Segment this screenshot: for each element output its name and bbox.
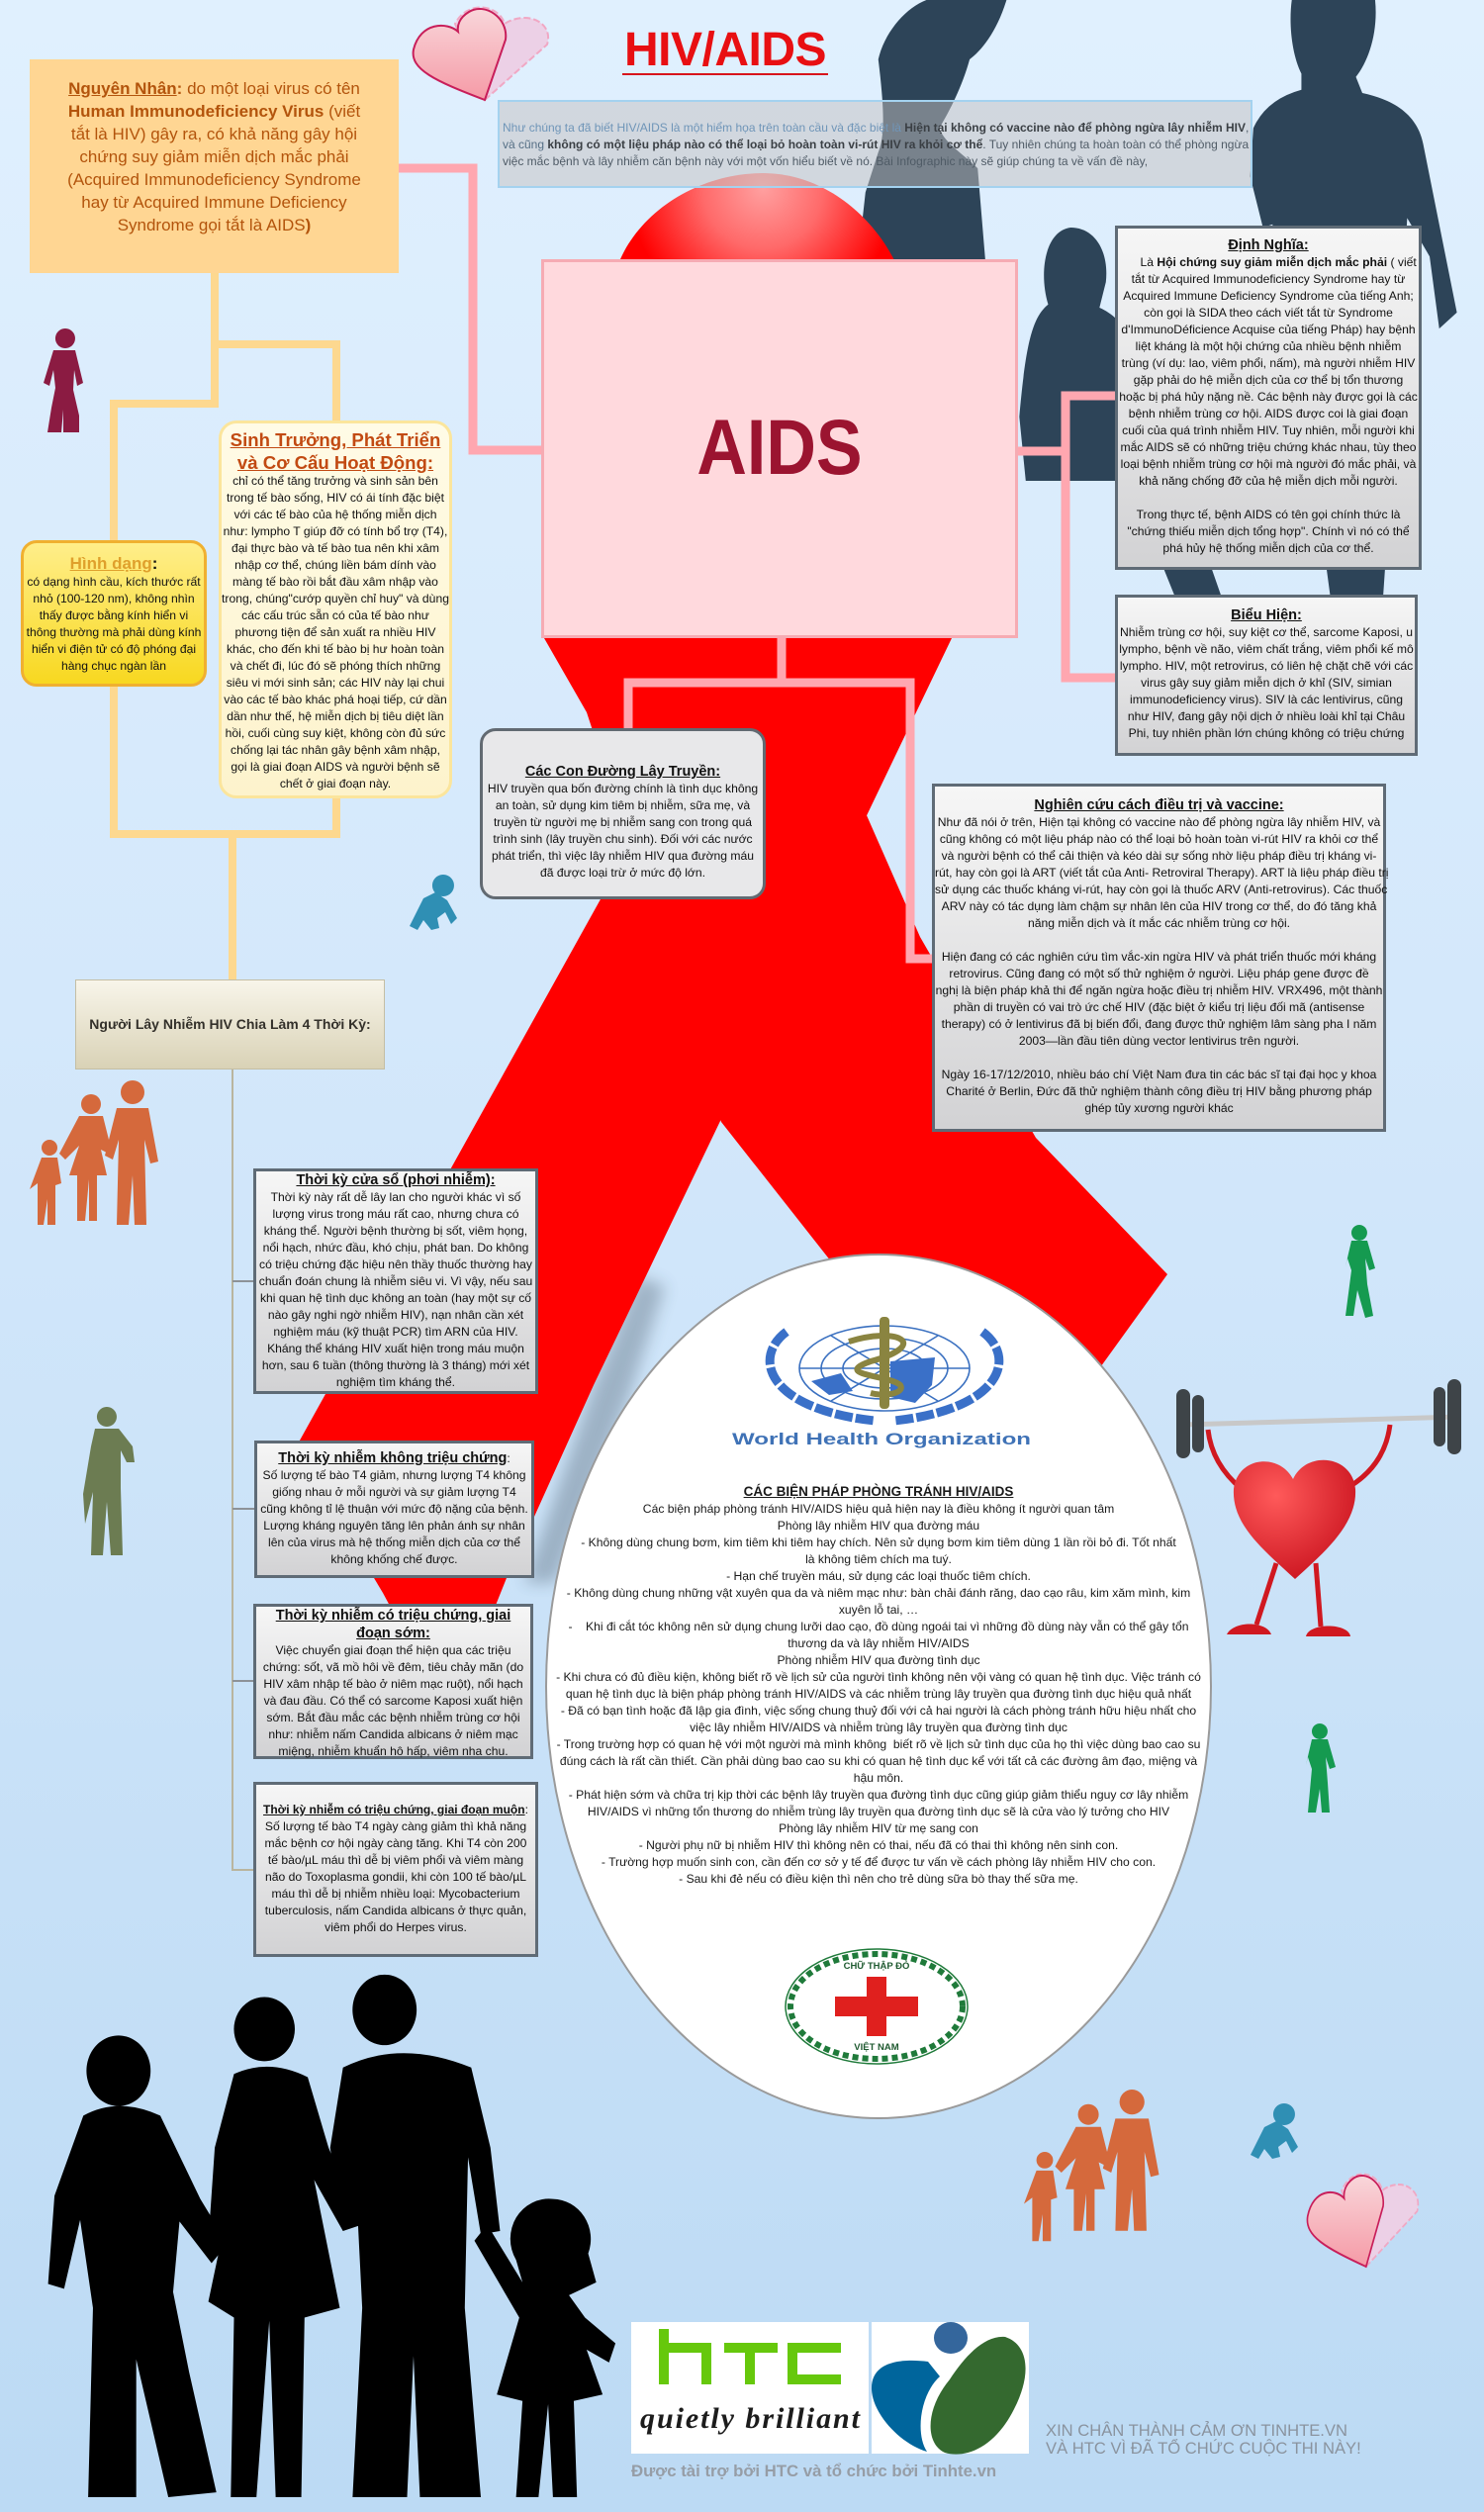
icon: pair of hearts, top bbox=[414, 7, 548, 100]
panel: definition: tắt từ Acquired Immunodeficiency Syndrome hay từ bbox=[1132, 272, 1405, 286]
prevention text: - Trong trường hợp có quan hệ với một người mà mình không biết rõ về lịch sử tình dục của họ thì việc dùng bao cao su bbox=[557, 1737, 1200, 1751]
panel: definition: Định Nghĩa: bbox=[1228, 237, 1309, 253]
title: HIV/AIDS bbox=[624, 24, 826, 76]
panel: treatment and vaccine research: ARV này có tác dụng làm chậm sự nhân lên của HIV trong cơ thể, do đó tăng khả bbox=[942, 899, 1376, 913]
panel: growth and activity: nhập cơ thể, chúng liền bám dính vào bbox=[234, 558, 436, 572]
panel: window period: khi quan hệ tình dục không an toàn (hay một sự cố bbox=[260, 1291, 531, 1305]
intro text box: việc mắc bệnh và lây nhiễm căn bệnh này với một vốn hiểu biết về nó. Bài Infographic này sẽ giúp chúng ta về vấn đề này, bbox=[503, 154, 1148, 168]
panel: window period bbox=[253, 1168, 538, 1394]
panel: treatment and vaccine research: năng miễn dịch và ít mắc các nhiễm trùng cơ hội. bbox=[1028, 916, 1290, 930]
prevention text: là không tiêm chích ma tuý. bbox=[805, 1552, 952, 1566]
prevention text: Phòng nhiễm HIV qua đường tình dục bbox=[777, 1653, 980, 1667]
panel: definition: Trong thực tế, bệnh AIDS có tên gọi chính thức là bbox=[1137, 508, 1400, 521]
panel: asymptomatic stage: không khống chế được. bbox=[330, 1552, 458, 1566]
panel: window period: nào gây nghi ngờ nhiễm HIV), nạn nhân cần xét bbox=[268, 1308, 523, 1322]
prevention text: quan hệ tình dục là biện pháp phòng tránh HIV/AIDS và các nhiễm trùng lây truyền qua đường tình dục hiệu quả nhất bbox=[566, 1687, 1191, 1701]
thank you note: VÀ HTC VÌ ĐÃ TỔ CHỨC CUỘC THI NÀY! bbox=[1046, 2439, 1361, 2458]
silhouette: black family bbox=[48, 1975, 615, 2497]
prevention text: việc lây nhiễm HIV/AIDS và nhiễm trùng lây truyền qua đường tình dục bbox=[690, 1721, 1067, 1734]
panel: cause: Human Immunodeficiency Virus (viết bbox=[68, 102, 360, 121]
prevention text: - Trường hợp muốn sinh con, cần đến cơ sở y tế để được tư vấn về cách phòng lây nhiễm HIV cho con. bbox=[602, 1855, 1156, 1869]
panel: asymptomatic stage: lên của virus mà hệ thống miễn dịch của cơ thể bbox=[268, 1535, 520, 1549]
prevention text: xuyên lỗ tai, … bbox=[839, 1603, 918, 1617]
panel: treatment and vaccine research: 2003—lần đầu tiên dùng vector lentivirus trên người. bbox=[1019, 1034, 1299, 1048]
panel: early symptomatic stage: đoạn sớm: bbox=[356, 1626, 430, 1641]
panel: manifestations: Nhiễm trùng cơ hội, suy kiệt cơ thể, sarcome Kaposi, u bbox=[1120, 625, 1413, 639]
panel: shape: nhỏ (100-120 nm), không nhìn bbox=[33, 592, 195, 605]
panel: treatment and vaccine research: therapy) có ở lentivirus đã bị biến đổi, đang được thử nghiệm lâm sàng pha I năm bbox=[942, 1017, 1376, 1031]
panel: treatment and vaccine research: phần di truyền có vai trò ức chế HIV (đặc biệt ở kiểu trị liệu đối mã (antisense bbox=[954, 1000, 1364, 1014]
prevention text: - Sau khi đẻ nếu có điều kiện thì nên cho trẻ dùng sữa bò thay thế sữa mẹ. bbox=[679, 1872, 1078, 1886]
panel: shape: hiển vi điện tử có độ phóng đại bbox=[32, 642, 196, 656]
icon: orange family left bbox=[30, 1080, 158, 1225]
panel: window period: nổi hạch, nhức đầu, khó chịu, phát ban. Do không bbox=[263, 1241, 528, 1255]
panel: early symptomatic stage: và đau đầu. Có thể có sarcome Kaposi xuất hiện bbox=[264, 1694, 522, 1708]
prevention text: - Đã có bạn tình hoặc đã lập gia đình, việc sống chung thuỷ đối với cả hai người là cách phòng tránh hữu hiệu nhất cho bbox=[561, 1704, 1196, 1718]
icon: red woman bbox=[44, 328, 83, 432]
panel: treatment and vaccine research: nghị là biện pháp khả thi để ngăn ngừa hoặc điều trị nhiễm HIV. VRX496, một thành bbox=[936, 983, 1382, 997]
panel: asymptomatic stage bbox=[254, 1441, 534, 1578]
logo: HTC quietly brilliant bbox=[631, 2322, 869, 2454]
logo: Tinhte.vn bbox=[872, 2322, 1029, 2455]
panel: growth and activity: chết ở giai đoạn này. bbox=[280, 777, 391, 791]
panel: growth and activity: gọi là giai đoạn AIDS và người bệnh sẽ bbox=[231, 760, 440, 774]
panel: definition: loại bệnh nhiễm trùng cơ hội mà người đó mắc phải, và bbox=[1121, 457, 1416, 471]
panel: late symptomatic stage: tuberculosis, nấm Candida albicans ở thực quản, bbox=[265, 1904, 526, 1917]
prevention text: - Người phụ nữ bị nhiễm HIV thì không nên có thai, nếu đã có thai thì không nên sinh con. bbox=[639, 1838, 1118, 1852]
panel: manifestations: lympho. HIV, một retrovirus, có liên hệ chặt chẽ với các bbox=[1120, 659, 1413, 673]
panel: cause: Syndrome gọi tắt là AIDS) bbox=[118, 216, 311, 234]
panel: growth and activity: đại thực bào và tế bào tua nên khi xâm bbox=[232, 541, 439, 555]
panel: growth and activity: Sinh Trưởng, Phát Triển bbox=[231, 429, 440, 450]
panel: shape bbox=[21, 540, 207, 687]
panel: late symptomatic stage: viêm phổi do Herpes virus. bbox=[325, 1920, 467, 1934]
panel: late symptomatic stage: Số lượng tế bào T4 ngày càng giảm thì khả năng bbox=[265, 1819, 526, 1833]
panel: window period: nghiệm tìm kháng thể. bbox=[336, 1375, 455, 1389]
panel: late symptomatic stage bbox=[253, 1782, 538, 1957]
panel: early symptomatic stage: Thời kỳ nhiễm có triệu chứng, giai bbox=[276, 1608, 510, 1624]
panel: asymptomatic stage: giống nhau ở mỗi người và sự giảm lượng T4 bbox=[272, 1485, 516, 1499]
logo: World Health Organization: World Health Organization bbox=[732, 1430, 1031, 1448]
prevention text: thương da và lây nhiễm HIV/AIDS bbox=[788, 1636, 970, 1650]
panel: window period: Kháng thể kháng HIV xuất hiện trong máu muộn bbox=[267, 1342, 524, 1355]
panel: early symptomatic stage: sớm. Bắt đầu mắc các bệnh nhiễm trùng cơ hội bbox=[266, 1711, 520, 1724]
panel: window period: nghiệm máu (kỹ thuật PCR) tìm ARN của HIV. bbox=[273, 1325, 518, 1339]
prevention text: CÁC BIỆN PHÁP PHÒNG TRÁNH HIV/AIDS bbox=[744, 1484, 1013, 1499]
panel: asymptomatic stage: Số lượng tế bào T4 giảm, nhưng lượng T4 không bbox=[263, 1468, 525, 1482]
panel: transmission routes bbox=[480, 728, 766, 899]
panel: treatment and vaccine research: Ngày 16-17/12/2010, nhiều báo chí Việt Nam đưa tin các bác sĩ tại đại học y khoa bbox=[942, 1068, 1376, 1081]
icon: blue baby right bbox=[1251, 2103, 1298, 2159]
panel: definition: Acquired Immune Deficiency Syndrome của tiếng Anh; bbox=[1123, 289, 1414, 303]
panel: growth and activity: chống lại tác nhân gây bệnh xâm nhập, bbox=[231, 743, 440, 757]
prevention text: Phòng lây nhiễm HIV qua đường máu bbox=[778, 1519, 979, 1533]
panel: cause: chứng suy giảm miễn dịch mắc phải bbox=[79, 147, 349, 166]
panel: window period: hơn, sau 6 tuần (thông thường là 3 tháng) mới xét bbox=[262, 1358, 529, 1372]
panel: growth and activity: khác, cho đến khi tế bào bị hư hoàn toàn bbox=[227, 642, 444, 656]
logo: Vietnam Red Cross: CHỮ THẬP ĐỎ bbox=[844, 1960, 909, 1972]
intro text box bbox=[498, 100, 1252, 188]
panel: cause bbox=[30, 59, 399, 273]
panel: definition: cuối của quá trình nhiễm HIV. Tuy nhiên, mỗi người khi bbox=[1122, 423, 1415, 437]
panel: treatment and vaccine research: Nghiên cứu cách điều trị và vaccine: bbox=[1034, 797, 1284, 813]
sponsor caption: Được tài trợ bởi HTC và tổ chức bởi Tinhte.vn bbox=[631, 2462, 996, 2480]
panel: late symptomatic stage: máu thì dễ bị nhiễm nhiều loại: Mycobacterium bbox=[271, 1887, 520, 1901]
panel: asymptomatic stage: Lượng kháng nguyên tăng lên phản ánh sự nhân bbox=[263, 1519, 525, 1533]
panel: treatment and vaccine research: và người bệnh có thể cải thiện và kéo dài sự sống nhờ liệu pháp điều trị kháng vi- bbox=[942, 849, 1376, 863]
icon: pair of hearts, bottom bbox=[1307, 2174, 1418, 2267]
prevention text bbox=[556, 1484, 1201, 1886]
prevention text: Phòng lây nhiễm HIV từ mẹ sang con bbox=[779, 1821, 978, 1835]
panel: early symptomatic stage: miệng, nhiễm khuẩn hô hấp, viêm nha chu. bbox=[278, 1744, 509, 1758]
panel: growth and activity: chỉ có thể tăng trưởng và sinh sản bên bbox=[232, 474, 438, 488]
panel: early symptomatic stage bbox=[253, 1604, 533, 1759]
panel: growth and activity: trong, chúng"cướp quyền chỉ huy" và dùng bbox=[222, 592, 449, 605]
panel: definition: bệnh nhiễm trùng cơ hội. AIDS được coi là giai đoạn bbox=[1129, 407, 1408, 420]
panel: window period: có triệu chứng đặc hiệu nên thầy thuốc thường hay bbox=[259, 1257, 532, 1271]
panel: growth and activity: và Cơ Cấu Hoạt Động: bbox=[237, 452, 433, 473]
panel: transmission routes: phát triển, thì việc lây nhiễm HIV qua đường máu bbox=[492, 849, 754, 863]
heading box: four stages bbox=[75, 979, 385, 1070]
prevention text: - Không dùng chung những vật xuyên qua da và niêm mạc như: bàn chải đánh răng, dao cạo râu, kim xăm mình, kim bbox=[567, 1586, 1190, 1600]
prevention text: HIV/AIDS vì những tổn thương do nhiễm trùng lây truyền qua đường tình dục sẽ là cửa vào lý tưởng cho HIV bbox=[588, 1805, 1169, 1818]
panel: window period: kháng thể. Người bệnh thường bị sốt, viêm họng, bbox=[264, 1224, 527, 1238]
panel: manifestations: Phi, tuy nhiên phần lớn chúng không có triệu chứng bbox=[1129, 726, 1404, 740]
panel: early symptomatic stage: chứng: sốt, vã mồ hôi về đêm, tiêu chảy mãn (do bbox=[263, 1660, 523, 1674]
prevention ellipse bbox=[545, 1254, 1212, 2119]
panel: cause: (Acquired Immunodeficiency Syndrome bbox=[67, 170, 361, 189]
panel: manifestations bbox=[1115, 595, 1418, 756]
panel: window period: Thời kỳ cửa sổ (phơi nhiễm): bbox=[296, 1172, 496, 1188]
panel: late symptomatic stage: não do Toxoplasma gondii, khi còn 100 tế bào/µL bbox=[265, 1870, 526, 1884]
panel: transmission routes: an toàn, sử dụng kim tiêm bị nhiễm, sữa mẹ, và bbox=[496, 798, 750, 812]
panel: growth and activity bbox=[219, 420, 452, 798]
panel: treatment and vaccine research: retrovirus. Cũng đang có một số thử nghiệm ở người. Liệu pháp gene được đề bbox=[949, 967, 1369, 980]
panel: treatment and vaccine research bbox=[932, 784, 1386, 1132]
AIDS ribbon bbox=[296, 173, 1167, 1682]
panel: early symptomatic stage: HIV xâm nhập tế bào ở niêm mạc ruột), nổi hạch bbox=[263, 1677, 523, 1691]
prevention text: - Khi chưa có đủ điều kiện, không biết rõ về lịch sử của người tình không nên vội vàng có quan hệ tình dục. Việc tránh có bbox=[556, 1670, 1201, 1684]
panel: growth and activity: vào các tế bào khác phá hoại tiếp, cứ dần bbox=[224, 693, 447, 706]
icon: orange family right bbox=[1024, 2090, 1159, 2241]
panel: shape: hàng chục ngàn lần bbox=[61, 659, 166, 673]
intro text box: Như chúng ta đã biết HIV/AIDS là một hiểm họa trên toàn cầu và đặc biệt là Hiện tại không có vaccine nào để phòng ngừa lây nhiễm HIV, bbox=[503, 121, 1249, 135]
panel: growth and activity: hồi, cuối cùng suy kiệt, không còn đủ sức bbox=[226, 726, 445, 740]
panel: treatment and vaccine research: sử dụng các thuốc kháng vi-rút, hay còn gọi là thuốc ARV (Anti-retrovirus). Các thuốc bbox=[935, 883, 1387, 896]
panel: definition bbox=[1115, 226, 1422, 570]
panel: early symptomatic stage: Việc chuyển giai đoạn thể hiện qua các triệu bbox=[275, 1643, 511, 1657]
panel: window period: Thời kỳ này rất dễ lây lan cho người khác vì số bbox=[271, 1190, 520, 1204]
panel: definition: mắc AIDS sẽ có những triệu chứng khác nhau, tùy theo bbox=[1120, 440, 1417, 454]
silhouette: woman, man and child in dark blue bbox=[858, 0, 1457, 597]
panel: definition: trùng (ví dụ: lao, viêm phổi, nấm), mà người nhiễm HIV bbox=[1122, 356, 1415, 370]
tan connector lines bbox=[114, 273, 336, 979]
panel: definition: liệt kháng là một hội chứng của nhiều bệnh nhiễm bbox=[1136, 339, 1401, 353]
panel: manifestations: Biểu Hiện: bbox=[1231, 607, 1302, 623]
prevention text: - Phát hiện sớm và chữa trị kịp thời các bệnh lây truyền qua đường tình dục cũng giúp giảm thiểu nguy cơ lây nhiễm bbox=[569, 1788, 1188, 1802]
panel: definition: còn gọi là SIDA theo cách viết tắt từ Syndrome bbox=[1144, 306, 1393, 320]
grey connector lines to the four stages bbox=[232, 1070, 254, 1870]
panel: growth and activity: với các tế bào của hệ thống miễn dịch bbox=[233, 508, 437, 521]
panel: growth and activity: trong tế bào sống, HIV có ái tính đặc biệt bbox=[227, 491, 444, 505]
prevention text: Các biện pháp phòng tránh HIV/AIDS hiệu quả hiện nay là điều không ít người quan tâm bbox=[643, 1502, 1114, 1516]
panel: definition: d'ImmunoDéficience Acquise của tiếng Pháp) hay bệnh bbox=[1121, 323, 1416, 336]
panel: treatment and vaccine research: cũng không có một liệu pháp nào có thể loại bỏ hoàn toàn vi-rút HIV ra khỏi cơ thể bbox=[940, 832, 1378, 846]
panel: manifestations: virus gây suy giảm miễn dịch ở khỉ (SIV, simian bbox=[1141, 676, 1392, 690]
panel: transmission routes: đã được loại trừ ở mức độ lớn. bbox=[540, 866, 705, 880]
pink connector lines bbox=[399, 168, 1115, 959]
panel: late symptomatic stage: mắc bệnh cơ hội ngày càng tăng. Khi T4 còn 200 bbox=[265, 1836, 526, 1850]
panel: early symptomatic stage: như: nhiễm nấm Candida albicans ở niêm mạc bbox=[268, 1727, 518, 1741]
panel: growth and activity: màng tế bào rồi bắt đầu xâm nhập vào bbox=[232, 575, 438, 589]
prevention text: - Không dùng chung bơm, kim tiêm khi tiêm hay chích. Nên sử dụng bơm kim tiêm dùng 1 lần rồi bỏ đi. Tốt nhất bbox=[581, 1535, 1176, 1549]
panel: shape: có dạng hình cầu, kích thước rất bbox=[27, 575, 201, 589]
panel: growth and activity: các cấu trúc sẵn có của tế bào như bbox=[241, 608, 429, 622]
panel: treatment and vaccine research: ghép tủy xương người khác bbox=[1084, 1101, 1234, 1115]
panel: growth and activity: như: lympho T giúp đỡ có tính bổ trợ (T4), bbox=[224, 524, 447, 538]
panel: shape: Hình dạng: bbox=[70, 554, 157, 573]
prevention text: đúng cách là rất cần thiết. Cần phải dùng bao cao su khi có quan hệ tình dục kể với tất cả các đường âm đạo, miệng và bbox=[560, 1754, 1197, 1768]
icon: green person, right lower bbox=[1306, 1723, 1336, 1813]
panel: definition: gặp phải do hệ miễn dịch của cơ thể bị tổn thương bbox=[1134, 373, 1403, 387]
panel: treatment and vaccine research: Hiện đang có các nghiên cứu tìm vắc-xin ngừa HIV và phát triển thuốc mới kháng bbox=[942, 950, 1376, 964]
panel: growth and activity: siêu vi mới sinh sản; các HIV này lại chui bbox=[227, 676, 444, 690]
panel: cause: hay từ Acquired Immune Deficiency bbox=[81, 193, 347, 212]
panel: treatment and vaccine research: Như đã nói ở trên, Hiện tại không có vaccine nào để phòng ngừa lây nhiễm HIV, và bbox=[938, 815, 1380, 829]
panel: definition: khả năng chống đỡ của hệ miễn dịch mỗi người. bbox=[1139, 474, 1398, 488]
panel: growth and activity: và chết đi, lúc đó sẽ phóng thích những bbox=[231, 659, 440, 673]
panel: treatment and vaccine research: Charité ở Berlin, Đức đã thử nghiệm thành công điều trị HIV bằng phương pháp bbox=[946, 1084, 1372, 1098]
panel: cause: tắt là HIV) gây ra, có khả năng gây hội bbox=[71, 125, 357, 143]
panel: late symptomatic stage: Thời kỳ nhiễm có triệu chứng, giai đoạn muộn: bbox=[263, 1803, 528, 1816]
panel: transmission routes: Các Con Đường Lây Truyền: bbox=[525, 764, 720, 780]
icon: olive businessman bbox=[83, 1407, 135, 1555]
thank you note: XIN CHÂN THÀNH CẢM ƠN TINHTE.VN bbox=[1046, 2421, 1347, 2440]
prevention text: - Hạn chế truyền máu, sử dụng các loại thuốc tiêm chích. bbox=[726, 1569, 1031, 1583]
icon: heart lifting barbell bbox=[1176, 1379, 1461, 1636]
panel: window period: chuẩn đoán chung là nhiễm siêu vi. Vì vậy, nếu sau bbox=[259, 1274, 532, 1288]
panel: treatment and vaccine research: rút, hay còn gọi là ART (viết tắt của Anti- Retroviral Therapy). ART là liệu pháp điều trị bbox=[935, 866, 1388, 880]
icon: blue baby bbox=[410, 875, 457, 930]
big AIDS box bbox=[541, 259, 1018, 638]
panel: transmission routes: trình sinh (lây truyền chu sinh). Đối với các nước bbox=[493, 832, 753, 846]
panel: asymptomatic stage: Thời kỳ nhiễm không triệu chứng: bbox=[278, 1450, 510, 1466]
prevention text: - Khi đi cắt tóc không nên sử dụng chung lưỡi dao cạo, đồ dùng ngoái tai vì những đồ dùng này vẫn có thể gây tổn bbox=[568, 1620, 1189, 1633]
panel: growth and activity: dần như thế, hệ miễn dịch bị tiêu diệt lần bbox=[227, 709, 444, 723]
panel: definition: phá hủy hệ thống miễn dịch của cơ thể. bbox=[1162, 541, 1374, 555]
panel: manifestations: immunodeficiency virus). SIV là các lentivirus, cũng bbox=[1130, 693, 1403, 706]
logo: Vietnam Red Cross: VIỆT NAM bbox=[854, 2041, 899, 2053]
panel: asymptomatic stage: cũng không tỉ lệ thuận với mức độ nặng của bệnh. bbox=[260, 1502, 528, 1516]
logo: HTC quietly brilliant: quietly brilliant bbox=[640, 2402, 862, 2435]
panel: late symptomatic stage: tế bào/µL máu thì dễ bị viêm phổi và viêm màng bbox=[268, 1853, 523, 1867]
panel: shape: thấy được bằng kính hiển vi bbox=[40, 608, 188, 622]
panel: manifestations: như HIV, đang gây nội dịch ở nhiều loài khỉ tại Châu bbox=[1128, 709, 1405, 723]
panel: definition: Là Hội chứng suy giảm miễn dịch mắc phải ( viết bbox=[1140, 255, 1417, 269]
panel: definition: hoặc bị phá hủy nặng nề. Các bệnh này được gọi là các bbox=[1119, 390, 1418, 404]
logo: Vietnam Red Cross bbox=[786, 1949, 968, 2064]
panel: window period: lượng virus trong máu rất cao, nhưng chưa có bbox=[273, 1207, 518, 1221]
panel: cause: Nguyên Nhân: do một loại virus có tên bbox=[68, 79, 360, 98]
heading box: four stages: Người Lây Nhiễm HIV Chia Làm 4 Thời Kỳ: bbox=[89, 1016, 371, 1032]
panel: manifestations: lympho, bệnh về não, viêm chất trắng, viêm phổi kế mô bbox=[1119, 642, 1414, 656]
prevention text: hậu môn. bbox=[854, 1771, 903, 1785]
thank you note bbox=[1046, 2421, 1361, 2458]
big AIDS box: AIDS bbox=[696, 404, 863, 491]
panel: transmission routes: truyền từ người mẹ bị nhiễm sang con trong quá bbox=[494, 815, 752, 829]
panel: transmission routes: HIV truyền qua bốn đường chính là tình dục không bbox=[488, 782, 758, 795]
panel: definition: "chứng thiếu miễn dịch tổng hợp". Chính vì nó có thể bbox=[1127, 524, 1410, 538]
icon: green person, right upper bbox=[1345, 1225, 1375, 1318]
intro text box: và cũng không có một liệu pháp nào có thể loại bỏ hoàn toàn vi-rút HIV ra khỏi cơ thể. Tuy nhiên chúng ta hoàn toàn có thể phòng ngừa bbox=[503, 138, 1249, 151]
panel: shape: thông thường mà phải dùng kính bbox=[27, 625, 201, 639]
panel: growth and activity: phương tiện để sản xuất ra nhiều HIV bbox=[234, 625, 436, 639]
